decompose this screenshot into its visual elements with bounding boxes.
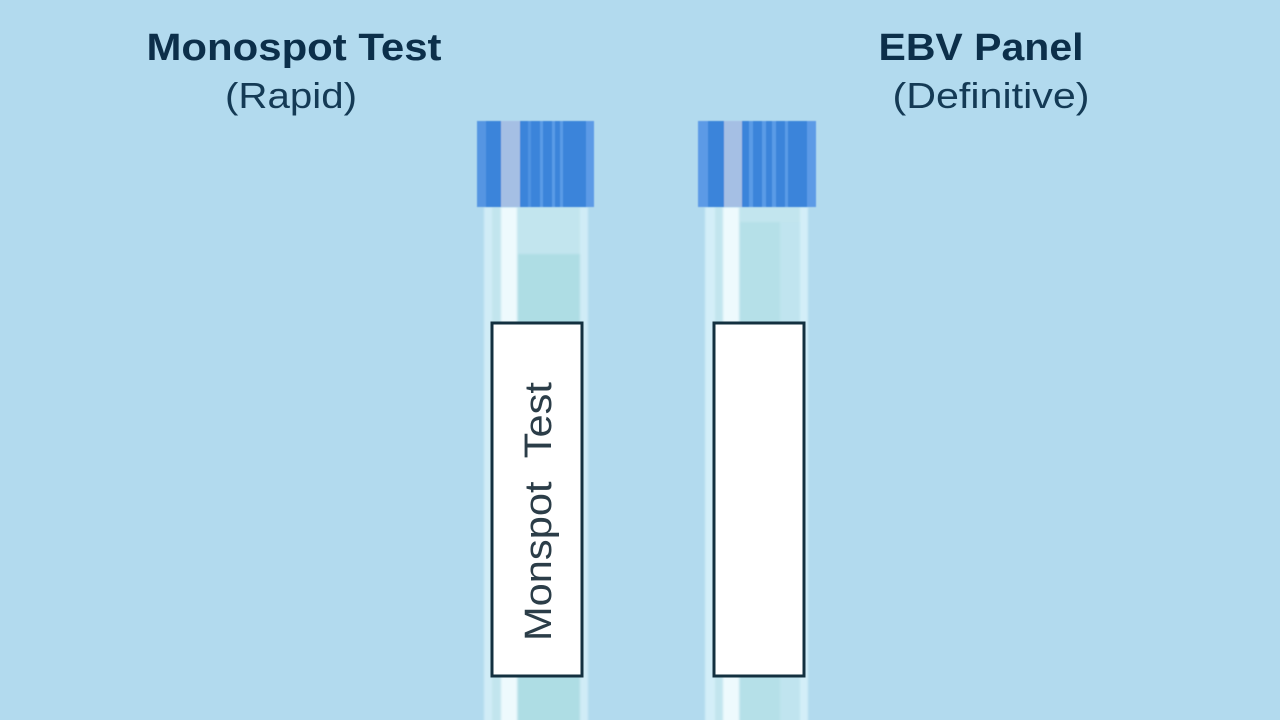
test tube: Monospot [477, 121, 594, 720]
cap [698, 121, 816, 207]
heading: Monospot Test (Rapid) [146, 27, 442, 116]
heading: Monospot Test (Rapid): (Rapid) [225, 75, 357, 116]
tube body [484, 207, 588, 720]
cap [477, 121, 594, 207]
label text: Monspot Test [518, 382, 560, 641]
heading: EBV Panel (Definitive) [878, 27, 1090, 116]
tube body [705, 207, 808, 720]
label [492, 323, 582, 676]
label [714, 323, 804, 676]
heading: Monospot Test (Rapid): Monospot Test [146, 27, 442, 69]
test tube: EBV Panel [698, 121, 816, 720]
heading: EBV Panel (Definitive): (Definitive) [892, 75, 1090, 116]
heading: EBV Panel (Definitive): EBV Panel [878, 27, 1084, 69]
